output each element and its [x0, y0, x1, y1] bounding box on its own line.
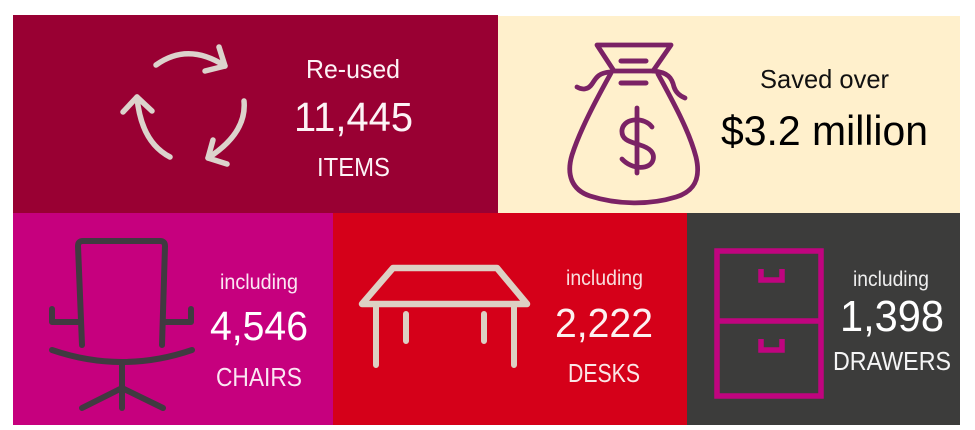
- text: chairs count: 4,546: [210, 303, 308, 349]
- panel: desks: [333, 213, 687, 425]
- text: items label: ITEMS: [317, 152, 390, 182]
- panel: savings: [498, 16, 960, 213]
- text: re-used label: Re-used: [306, 54, 400, 84]
- icon: money bag: [570, 45, 698, 203]
- panel: chairs: [13, 213, 333, 425]
- icon: filing drawers: [717, 251, 821, 396]
- text: saved over label: Saved over: [760, 64, 889, 94]
- text: items count: 11,445: [294, 94, 413, 140]
- text: desks label: DESKS: [568, 358, 640, 388]
- panel: re-used items: [13, 15, 498, 213]
- text: drawers label: DRAWERS: [833, 346, 951, 376]
- text: chairs label: CHAIRS: [216, 362, 302, 392]
- icon: desk: [362, 268, 527, 365]
- panel: drawers: [687, 213, 960, 425]
- text: chairs including: including: [220, 271, 298, 294]
- text: desks count: 2,222: [555, 300, 653, 346]
- text: drawers count: 1,398: [840, 292, 944, 341]
- text: desks including: including: [566, 267, 643, 290]
- icon: office chair: [52, 241, 192, 408]
- text: savings amount: $3.2 million: [721, 107, 928, 154]
- text: drawers including: including: [853, 268, 929, 291]
- icon: recycling arrows: [123, 47, 244, 164]
